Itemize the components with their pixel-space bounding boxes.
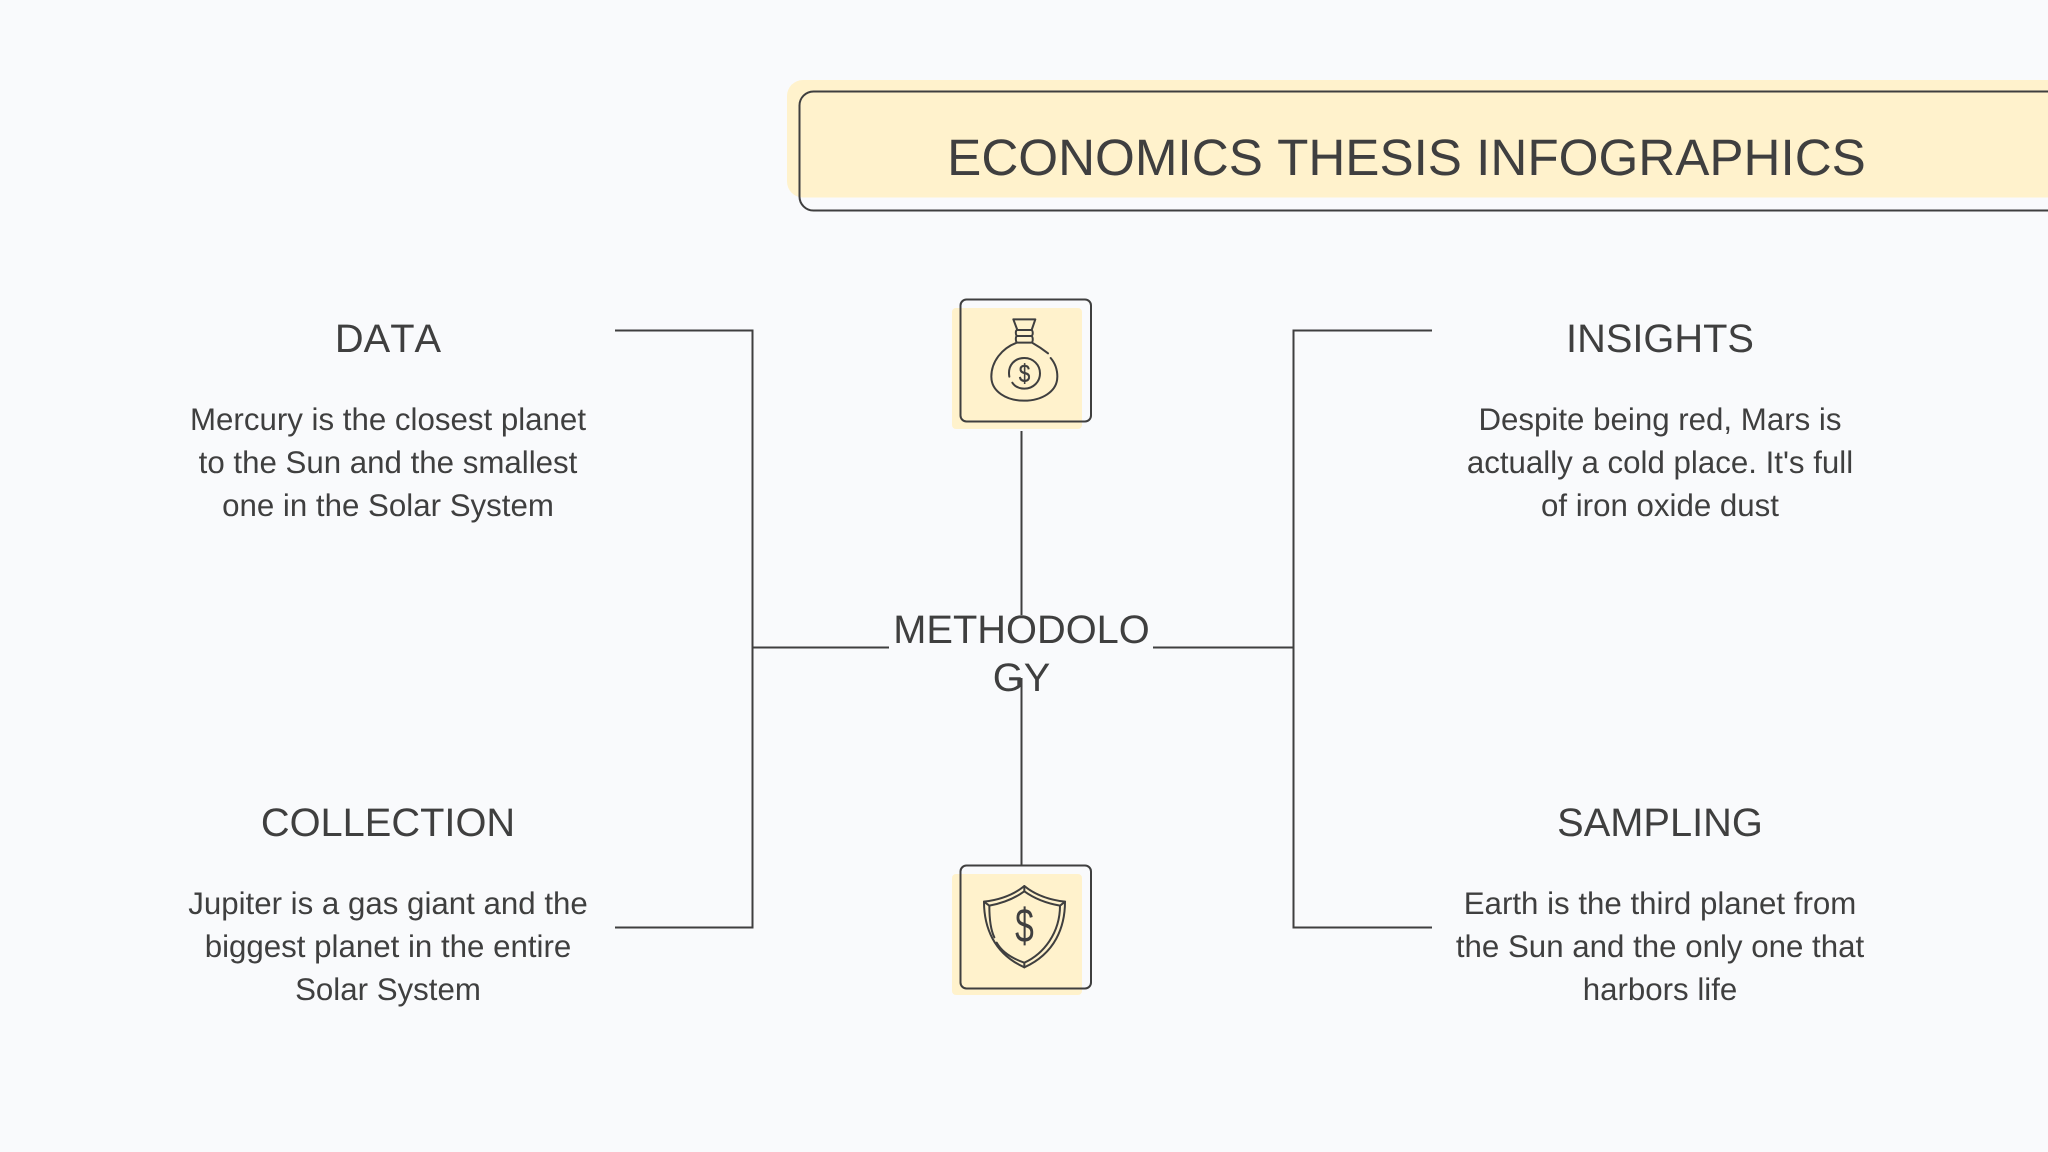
connector: left bracket bbox=[615, 330, 889, 928]
title: ECONOMICS THESIS INFOGRAPHICS bbox=[947, 129, 1866, 186]
heading: insights: INSIGHTS bbox=[1566, 317, 1754, 361]
text block: insights: of iron oxide dust bbox=[1541, 488, 1779, 523]
text block: collection: Jupiter is a gas giant and the bbox=[188, 886, 588, 921]
connector: bottom vertical bbox=[1020, 678, 1022, 865]
text block: sampling bbox=[1456, 886, 1864, 1007]
text block: data bbox=[190, 402, 586, 523]
text block: insights: Despite being red, Mars is bbox=[1478, 402, 1842, 437]
text block: data: to the Sun and the smallest bbox=[199, 445, 578, 480]
text block: collection: Solar System bbox=[295, 972, 481, 1007]
icon: money bag bbox=[952, 300, 1091, 429]
icon: shield with dollar bbox=[952, 866, 1091, 995]
center label: methodology bbox=[893, 608, 1150, 700]
text block: collection bbox=[188, 886, 588, 1007]
panel: data bbox=[190, 317, 586, 523]
heading: collection: COLLECTION bbox=[261, 801, 515, 845]
text block: data: one in the Solar System bbox=[222, 488, 554, 523]
icon: money bag: $ bbox=[1019, 360, 1030, 388]
icon: shield with dollar: $ bbox=[1015, 899, 1034, 953]
text block: sampling: the Sun and the only one that bbox=[1456, 929, 1864, 964]
heading: data: DATA bbox=[335, 317, 442, 361]
center label: methodology: METHODOLO bbox=[893, 608, 1150, 652]
heading: sampling: SAMPLING bbox=[1557, 801, 1763, 845]
center label: methodology: GY bbox=[993, 656, 1050, 700]
panel: collection bbox=[188, 801, 588, 1007]
text block: collection: biggest planet in the entire bbox=[205, 929, 571, 964]
title banner bbox=[787, 80, 2048, 210]
connector: right bracket bbox=[1153, 330, 1432, 928]
text block: insights: actually a cold place. It's full bbox=[1467, 445, 1853, 480]
text block: data: Mercury is the closest planet bbox=[190, 402, 586, 437]
text block: sampling: harbors life bbox=[1583, 972, 1737, 1007]
panel: insights bbox=[1467, 317, 1853, 523]
text block: insights bbox=[1467, 402, 1853, 523]
panel: sampling bbox=[1456, 801, 1864, 1007]
text block: sampling: Earth is the third planet from bbox=[1464, 886, 1856, 921]
connector: top vertical bbox=[1020, 431, 1022, 615]
